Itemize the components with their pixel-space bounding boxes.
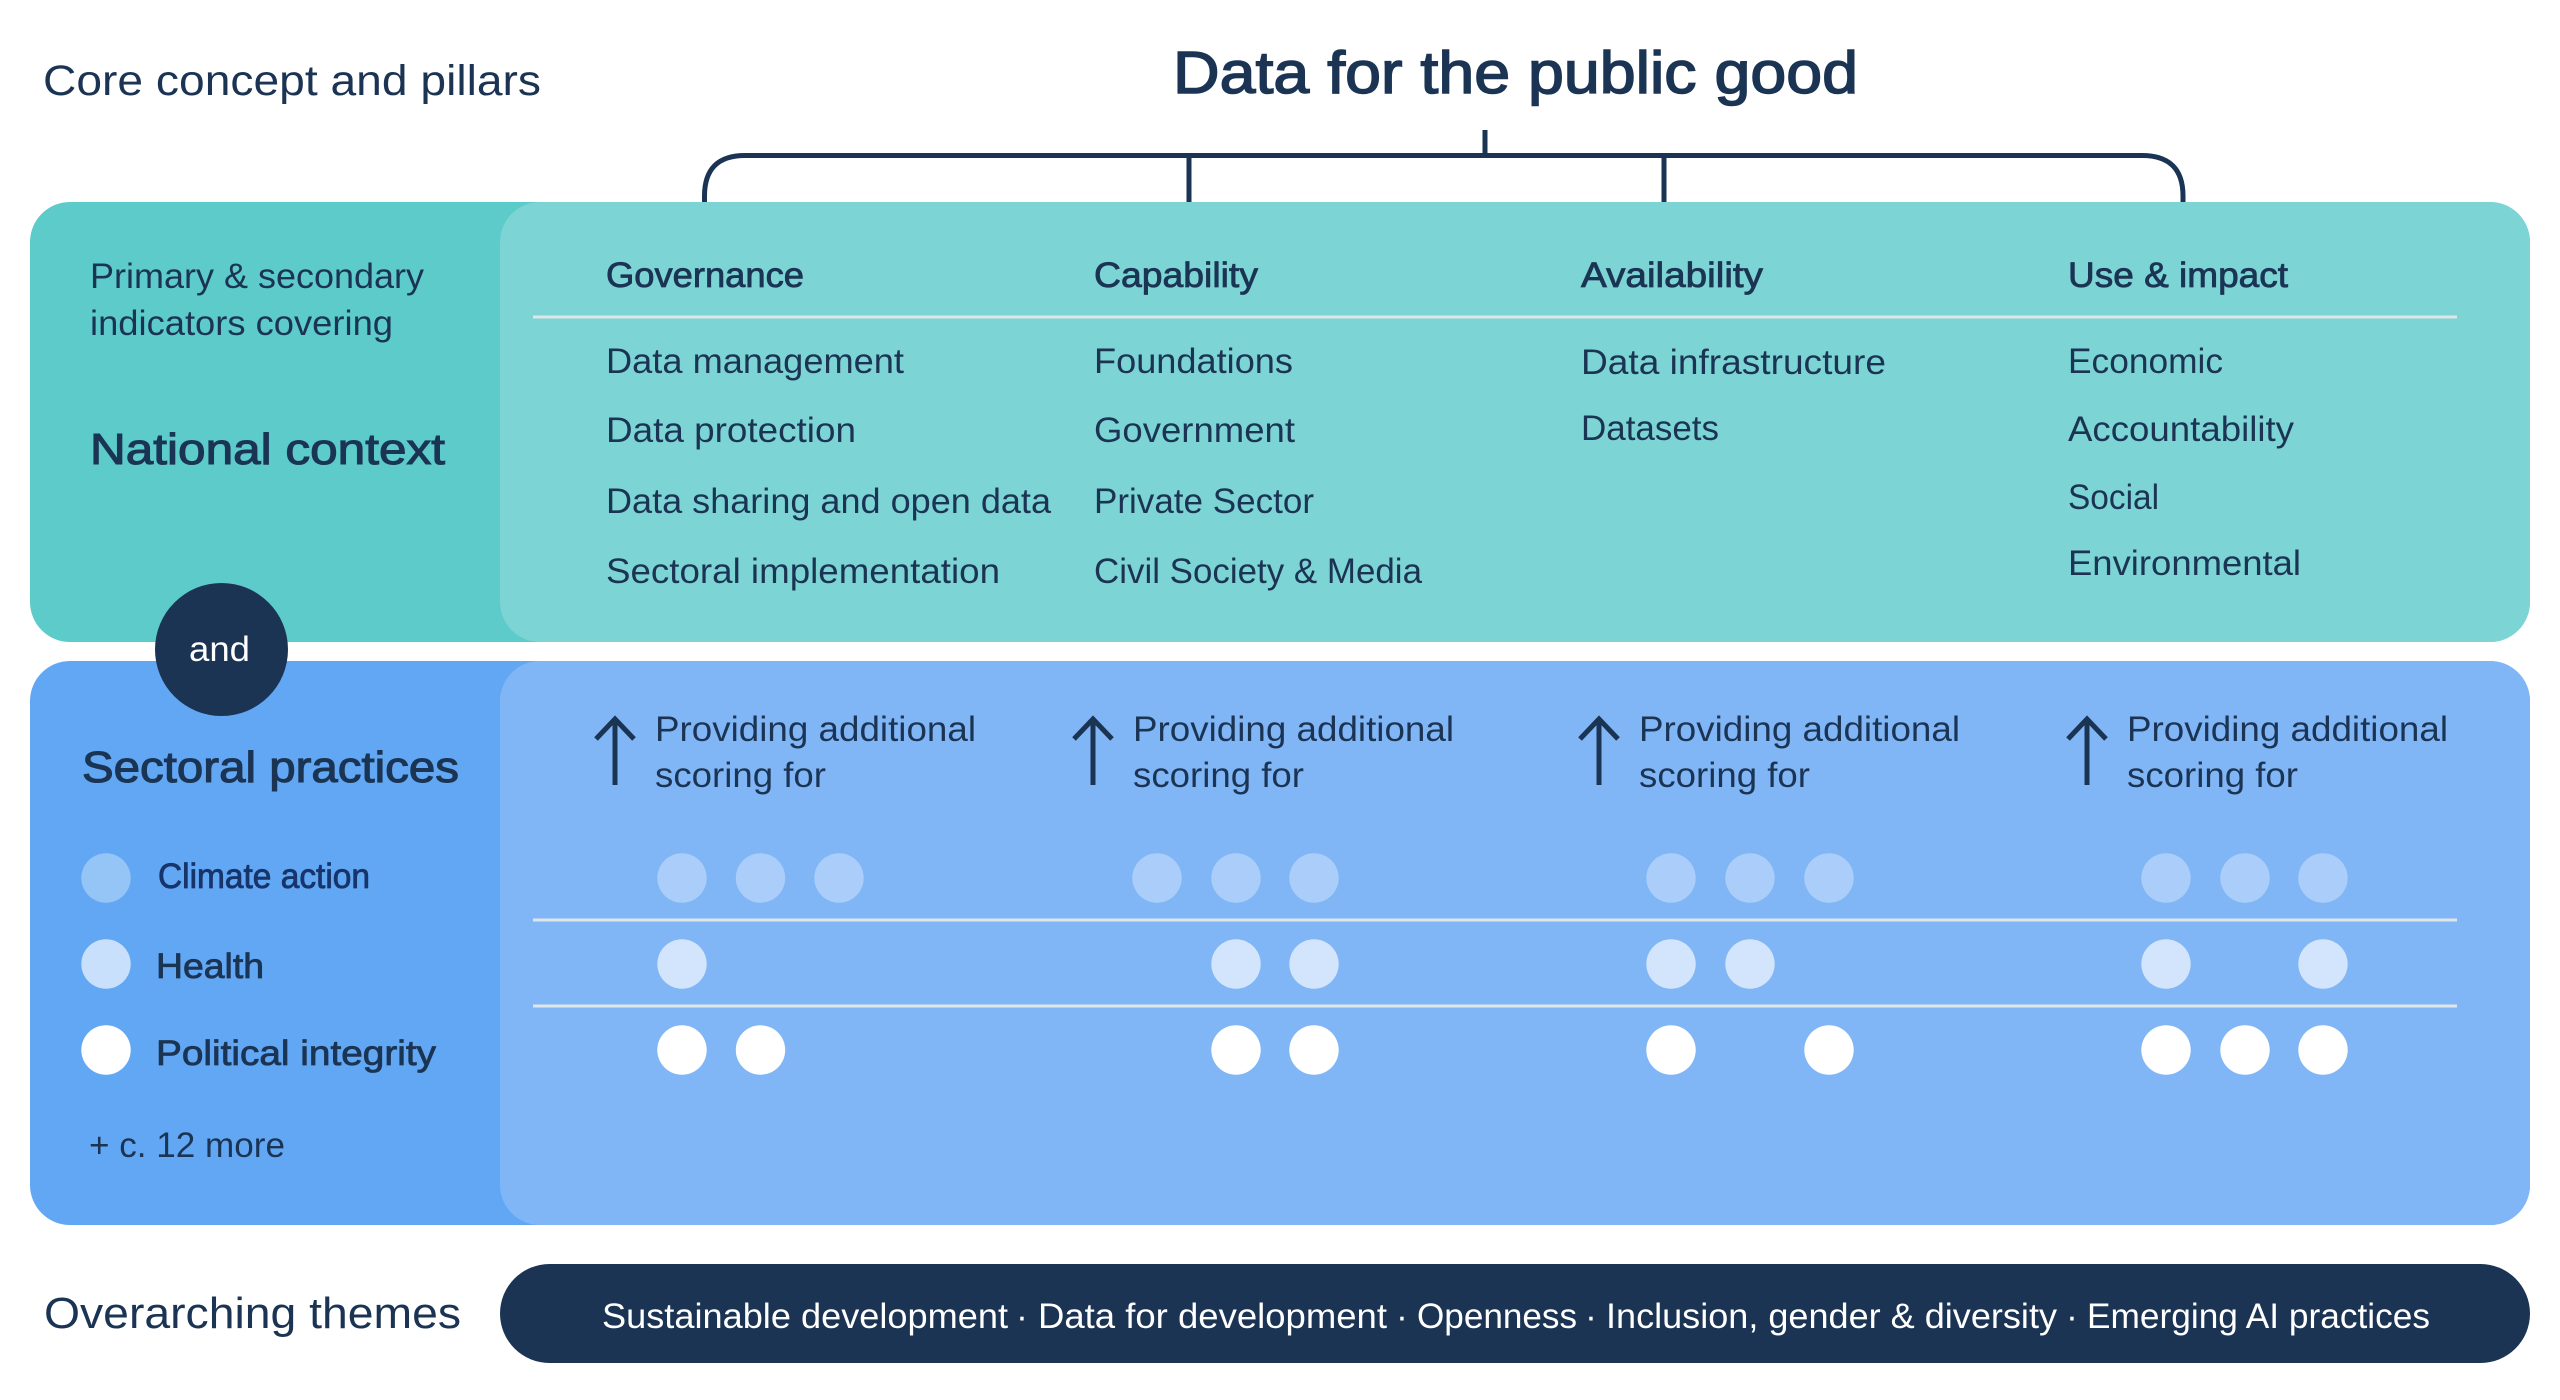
national context intro text: Primary & secondary — [90, 257, 425, 296]
legend: sectors: Health — [156, 947, 264, 986]
pillar: capability: Capability — [1094, 256, 1259, 295]
bracket connecting title to four pillars — [704, 130, 2183, 204]
scoring caption: Providing additional — [2127, 710, 2448, 749]
legend: sectors — [81, 853, 437, 1075]
national context intro text — [90, 257, 425, 343]
scoring caption — [2127, 710, 2448, 795]
pillar: capability: Government — [1094, 411, 1295, 450]
pillar: governance — [606, 256, 1052, 591]
pillar: availability: Datasets — [1581, 409, 1719, 448]
badge: and: and — [189, 630, 250, 669]
pillar: availability — [1581, 256, 1886, 448]
scoring caption: scoring for — [2127, 756, 2298, 795]
pillar: governance: Data protection — [606, 411, 856, 450]
themes bar: Sustainable development — [602, 1297, 1008, 1336]
themes bar: · — [1585, 1297, 1597, 1336]
themes bar: · — [1396, 1297, 1408, 1336]
pillar: capability: Civil Society & Media — [1094, 552, 1423, 591]
dots — [657, 853, 864, 1075]
scoring caption: scoring for — [1133, 756, 1304, 795]
panel: four pillars — [500, 202, 2530, 642]
arrow up to use and impact — [2068, 719, 2106, 785]
themes bar — [500, 1264, 2530, 1363]
pillar: availability: Data infrastructure — [1581, 343, 1886, 382]
scoring caption — [1133, 710, 1454, 795]
pillar: use and impact: Accountability — [2068, 410, 2295, 449]
legend: sectors: Climate action — [158, 857, 370, 896]
legend: sectors: Political integrity — [156, 1034, 437, 1073]
heading: overarching themes: Overarching themes — [44, 1289, 461, 1338]
scoring column: availability — [1580, 710, 1960, 1075]
dots — [1132, 853, 1339, 1075]
title: Data for the public good — [1173, 40, 1858, 106]
scoring column: capability — [1074, 710, 1454, 1075]
pillar: capability: Foundations — [1094, 342, 1293, 381]
heading: national context: National context — [90, 425, 445, 474]
dots — [2141, 853, 2348, 1075]
arrow up to capability — [1074, 719, 1112, 785]
themes bar: Openness — [1417, 1297, 1577, 1336]
pillar: use and impact: Use & impact — [2068, 256, 2288, 295]
heading: core concept and pillars: Core concept and pillars — [43, 57, 541, 105]
scoring caption — [655, 710, 976, 795]
pillar: availability: Availability — [1581, 256, 1764, 295]
panel: sectoral practices — [30, 661, 2530, 1225]
pillar: capability — [1094, 256, 1423, 591]
dots — [1646, 853, 1854, 1075]
pillar: use and impact: Environmental — [2068, 544, 2301, 583]
scoring caption: Providing additional — [655, 710, 976, 749]
scoring caption: Providing additional — [1133, 710, 1454, 749]
heading: sectoral practices: Sectoral practices — [82, 743, 459, 792]
panel: national context — [30, 202, 2530, 642]
themes bar: · — [2066, 1297, 2078, 1336]
pillar: use and impact: Economic — [2068, 342, 2223, 381]
national context intro text: indicators covering — [90, 304, 393, 343]
scoring caption — [1639, 710, 1960, 795]
pillar: capability: Private Sector — [1094, 482, 1314, 521]
themes bar: Inclusion, gender & diversity — [1606, 1297, 2058, 1336]
pillar: governance: Governance — [606, 256, 804, 295]
scoring caption: scoring for — [655, 756, 826, 795]
scoring column: governance — [596, 710, 976, 1075]
scoring caption: Providing additional — [1639, 710, 1960, 749]
pillar: use and impact — [2068, 256, 2301, 583]
themes bar: Data for development — [1038, 1297, 1387, 1336]
pillar: use and impact: Social — [2068, 478, 2159, 517]
scoring column: use and impact — [2068, 710, 2448, 1075]
badge: and — [155, 583, 288, 716]
pillar: governance: Data management — [606, 342, 904, 381]
themes bar: · — [1016, 1297, 1028, 1336]
arrow up to governance — [596, 719, 634, 785]
scoring caption: scoring for — [1639, 756, 1810, 795]
note: more sectors: + c. 12 more — [89, 1126, 285, 1165]
pillar: governance: Data sharing and open data — [606, 482, 1052, 521]
themes bar: Emerging AI practices — [2087, 1297, 2430, 1336]
pillar: governance: Sectoral implementation — [606, 552, 1000, 591]
arrow up to availability — [1580, 719, 1618, 785]
panel: additional scoring — [500, 661, 2530, 1225]
